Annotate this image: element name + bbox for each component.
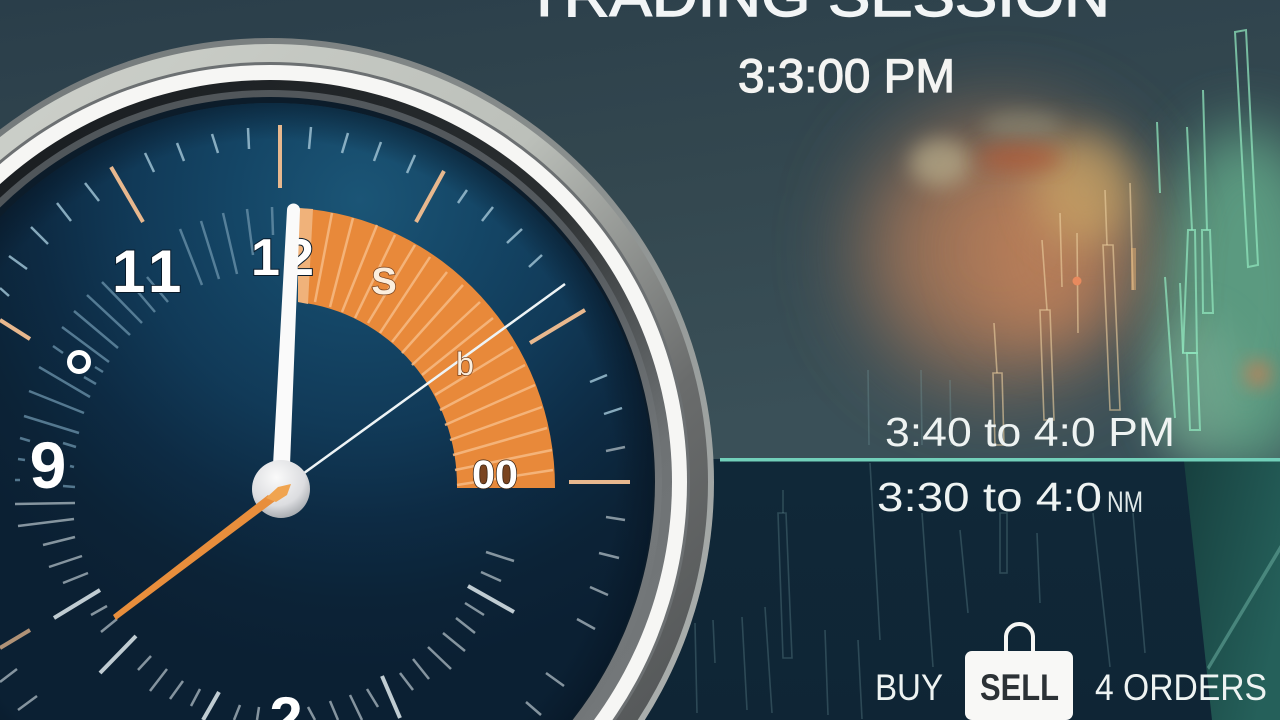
dial numeral 9: 9 bbox=[30, 428, 66, 502]
garbled suffix: NM bbox=[1107, 486, 1143, 519]
gauge: outer minute ticks bbox=[0, 127, 625, 720]
background: upper slate panel bbox=[0, 0, 1280, 459]
chart: faint candlesticks lower bbox=[695, 463, 1145, 719]
glow: orange and green light behind chart bbox=[865, 111, 1280, 475]
session time upper: 3:40 to 4:0 PM bbox=[885, 409, 1175, 455]
icon: sell padlock bbox=[965, 624, 1073, 720]
session divider line bbox=[720, 458, 1280, 462]
label SELL: SELL bbox=[980, 667, 1059, 708]
stripes in sector bbox=[315, 213, 553, 485]
session time lower: 3:30 to 4:0 bbox=[877, 474, 1102, 520]
chart: candlesticks upper right bbox=[868, 30, 1258, 445]
dial mark o bbox=[70, 352, 88, 372]
gauge: inner tick ring bbox=[15, 207, 273, 487]
gauge: silver bezel bbox=[0, 38, 714, 720]
gauge: orange session sector bbox=[298, 208, 555, 488]
gauge: center hub bbox=[252, 460, 310, 518]
sector label S: S bbox=[371, 261, 397, 303]
panel: teal wedge lower right bbox=[1184, 461, 1280, 720]
gauge: hour ticks bbox=[0, 125, 630, 720]
label 4 ORDERS: 4 ORDERS bbox=[1095, 667, 1267, 708]
gauge: orange hour hand bbox=[113, 484, 291, 620]
sector label b: b bbox=[456, 346, 474, 382]
gauge: dial face bbox=[0, 103, 653, 720]
dial numeral 11: 11 bbox=[112, 238, 181, 305]
label BUY: BUY bbox=[875, 667, 943, 708]
sector label 00: 00 bbox=[472, 453, 518, 497]
background: lower dark panel bbox=[0, 459, 1280, 720]
dial numeral 12: 12 bbox=[251, 229, 314, 287]
gauge: white minute hand bbox=[273, 204, 300, 465]
gauge: thin second hand bbox=[300, 284, 565, 476]
time heading: 3:3:00 PM bbox=[738, 49, 955, 102]
